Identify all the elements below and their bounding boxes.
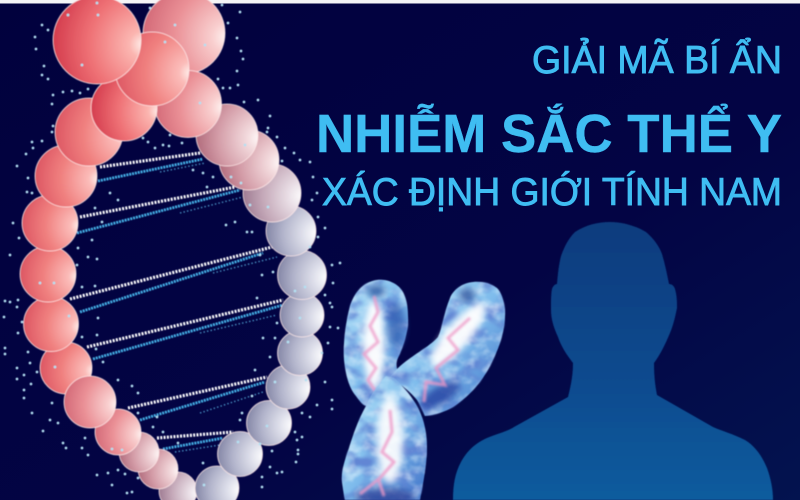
title [316, 37, 782, 214]
DNA beads [20, 0, 326, 500]
faint rung strands [160, 163, 277, 452]
DNA rungs [70, 153, 283, 452]
Y chromosome [342, 280, 505, 500]
white rung strands [70, 153, 283, 438]
title line 1: GIẢI MÃ BÍ ẨN [532, 37, 782, 82]
silhouette of a man [453, 222, 773, 500]
DNA helix [4, 0, 340, 500]
top white strip [0, 0, 800, 4]
chromosome right arm [390, 282, 505, 416]
blue rung strands [77, 159, 283, 449]
chromosome left arm [344, 280, 408, 406]
particles [4, 3, 340, 493]
title line 2: NHIỄM SẮC THỂ Y [316, 103, 782, 164]
chromosome lower arm [342, 376, 427, 500]
title line 3: XÁC ĐỊNH GIỚI TÍNH NAM [322, 171, 782, 214]
